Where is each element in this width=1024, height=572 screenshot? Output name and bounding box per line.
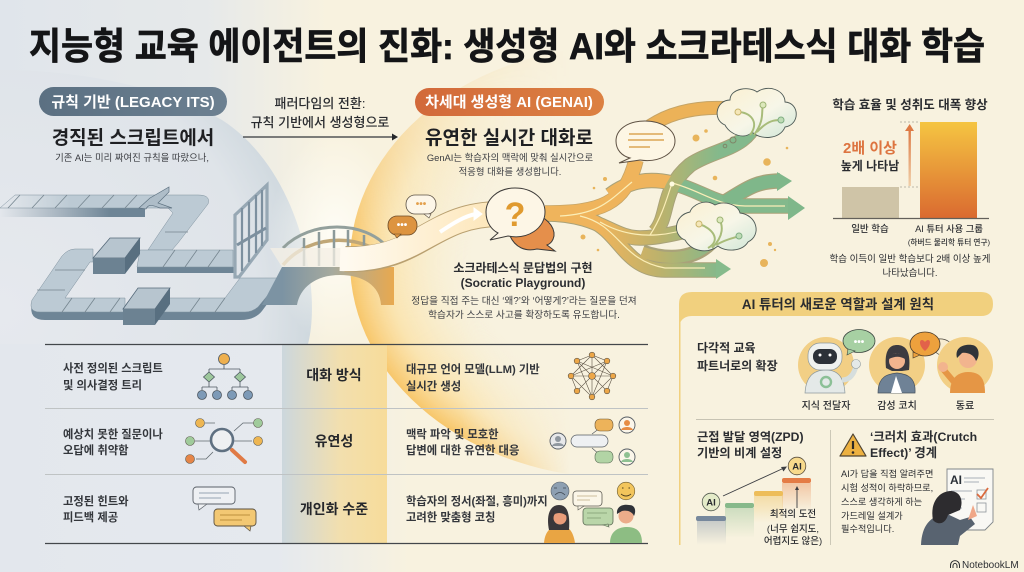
role labels: 감성 코치	[877, 399, 917, 412]
bar labels: AI 튜터 사용 그룹	[915, 224, 983, 234]
text block: Socratic playground: (Socratic Playground)	[461, 276, 585, 290]
label: optimal challenge	[764, 508, 822, 547]
row: flexibility: 맥락 파악 및 모호한	[406, 427, 499, 441]
role labels: 동료	[956, 400, 974, 412]
paradigm shift arrow: 패러다임의 전환:	[275, 96, 365, 111]
row: conversation mode	[63, 361, 540, 393]
table: legacy vs GenAI comparison	[45, 344, 648, 544]
text: multi-faceted partner: 다각적 교육	[697, 340, 756, 355]
row: flexibility: 오답에 취약함	[63, 443, 129, 457]
bubble: green	[583, 508, 613, 527]
row: conversation mode: 대규모 언어 모델(LLM) 기반	[406, 362, 540, 376]
row: conversation mode: 사전 정의된 스크립트	[63, 361, 163, 375]
panel header	[679, 292, 993, 545]
chart: learning gain bars	[830, 97, 991, 279]
text: crutch description	[841, 468, 933, 534]
row: personalization: 피드백 제공	[63, 510, 118, 524]
text: multi-faceted partner	[697, 340, 778, 373]
text: crutch description: 스스로 생각하게 하는	[841, 496, 922, 507]
text: ZPD scaffold: 근접 발달 영역(ZPD)	[697, 430, 804, 444]
branches	[545, 108, 805, 279]
face: frustrated	[551, 482, 569, 500]
pill: legacy label: 규칙 기반 (LEGACY ITS)	[51, 94, 215, 111]
row: conversation mode: 실시간 생성	[406, 380, 461, 393]
bar labels: 일반 학습	[851, 223, 889, 235]
heading: crutch effect: Effect)’ 경계	[870, 446, 937, 460]
text: GenAI description: 적응형 대화를 생성합니다.	[459, 166, 561, 177]
panel: generative AI heading	[415, 88, 604, 177]
bar: AI tutor group	[920, 122, 977, 218]
chart caption: 나타났습니다.	[882, 268, 938, 279]
diagram: scaffold steps	[696, 457, 822, 547]
block: lower track block	[123, 288, 170, 325]
block: upper track block	[93, 238, 140, 274]
text block: Socratic playground: 정답을 직접 주는 대신 ‘왜?’와 ‘어떻게?’라는 질문을 던져	[411, 294, 637, 307]
marker: AI start: AI	[706, 498, 716, 508]
cloud: lower idea	[676, 202, 756, 251]
paradigm shift arrow	[243, 96, 398, 140]
bubble: question mark: ?	[505, 196, 525, 234]
icon: neural network	[568, 352, 616, 400]
decorative dots	[580, 129, 788, 267]
text: GenAI description	[427, 152, 594, 177]
text: crutch description: 필수적입니다.	[841, 523, 894, 534]
title: 지능형 교육 에이전트의 진화: 생성형 AI와 소크라테스식 대화 학습	[29, 26, 985, 67]
callout: more than twice	[841, 140, 899, 173]
pill: GenAI label: 차세대 생성형 AI (GENAI)	[425, 94, 593, 111]
row: personalization: 개인화 수준	[300, 501, 368, 517]
logo: NotebookLM: NotebookLM	[962, 560, 1019, 571]
callout: more than twice: 2배 이상	[843, 140, 897, 157]
label: optimal challenge: (너무 쉽지도,	[767, 524, 819, 535]
row: conversation mode: 및 의사결정 트리	[63, 378, 142, 392]
row: personalization: 학습자의 정서(좌절, 흥미)까지	[406, 494, 548, 508]
role: knowledge transmitter robot	[798, 330, 875, 393]
paradigm shift arrow: 규칙 기반에서 생성형으로	[251, 115, 389, 130]
role labels	[802, 399, 974, 412]
icon: warning	[840, 434, 866, 456]
bar labels: (하버드 물리학 튜터 연구)	[908, 237, 991, 247]
avatar: learner	[550, 433, 566, 449]
heading: crutch effect	[870, 429, 977, 460]
person: woman	[544, 505, 575, 543]
row: flexibility: 예상치 못한 질문이나	[63, 427, 163, 441]
center column band	[282, 345, 387, 543]
row: personalization: 고정된 힌트와	[63, 494, 129, 508]
avatar: green	[619, 449, 635, 465]
chart title: 학습 효율 및 성취도 대폭 향상	[832, 97, 988, 112]
text: ZPD scaffold: 기반의 비계 설정	[697, 445, 782, 460]
text: crutch description: 가드레일 설계가	[841, 510, 903, 521]
row: flexibility: 유연성	[315, 433, 353, 449]
bridge	[262, 227, 394, 305]
bar: general learning	[842, 187, 899, 218]
marker: AI goal: AI	[792, 462, 802, 472]
cloud: upper idea	[717, 88, 796, 148]
label: optimal challenge: 최적의 도전	[770, 508, 816, 520]
heading: rigid scripts: 경직된 스크립트에서	[52, 127, 214, 149]
icon: fixed chat bubbles	[193, 487, 256, 531]
text: legacy description: 기존 AI는 미리 짜여진 규칙을 따랐으나,	[55, 152, 209, 163]
bar labels	[851, 223, 991, 247]
text: multi-faceted partner: 파트너로의 확장	[697, 358, 778, 373]
illustration: student checking document	[921, 469, 993, 545]
text block: Socratic playground: 소크라테스식 문답법의 구현	[453, 260, 593, 275]
outlines	[545, 108, 790, 270]
avatar: orange	[619, 417, 635, 433]
bubbles: heart	[910, 332, 953, 361]
arrow: doubled gain	[905, 124, 914, 186]
illustration: emotional coaching	[544, 482, 642, 543]
ribbon to question bubble	[340, 208, 500, 259]
row: conversation mode: 대화 방식	[306, 367, 362, 383]
callout: more than twice: 높게 나타남	[841, 159, 899, 173]
row: personalization: 고려한 맞춤형 코칭	[406, 510, 495, 524]
chart caption	[830, 254, 990, 279]
role labels: 지식 전달자	[802, 399, 850, 412]
bubble: robot chat: •••	[854, 337, 865, 348]
illustration: branching dialogue flow	[340, 88, 805, 279]
text: GenAI description: GenAI는 학습자의 맥락에 맞춰 실시간으로	[427, 152, 594, 163]
bubbles: small dots chat: •••	[416, 199, 427, 210]
row: flexibility	[63, 427, 519, 457]
role: peer	[937, 337, 993, 393]
pill: legacy label	[39, 87, 227, 116]
icon: magnifier with nodes	[186, 418, 262, 464]
bubbles: small dots chat: •••	[397, 220, 408, 231]
ramp	[139, 187, 172, 209]
label: optimal challenge: 어렵지도 않은)	[764, 535, 822, 547]
text block: Socratic playground	[411, 260, 637, 321]
pill: GenAI label	[415, 88, 604, 116]
illustration: rigid script track	[0, 185, 394, 325]
page background	[0, 0, 562, 572]
heading: flexible real-time dialogue: 유연한 실시간 대화로	[425, 127, 593, 149]
text: crutch description: 시험 성적이 하락하므로,	[841, 482, 933, 493]
panel: AI tutor roles and design principles	[679, 292, 994, 547]
text: crutch description: AI가 답을 직접 알려주면	[841, 468, 933, 479]
bubbles: small dots chat	[388, 195, 436, 238]
track surfaces	[0, 195, 282, 312]
bubble: text lines	[616, 121, 675, 163]
heading: crutch effect: ‘크러치 효과(Crutch	[870, 429, 977, 444]
chart caption: 학습 이득이 일반 학습보다 2배 이상 높게	[830, 254, 990, 265]
track sides	[0, 208, 282, 320]
role: emotional coach	[869, 332, 953, 393]
bubble: question mark	[486, 188, 555, 251]
gate	[235, 185, 267, 277]
face: smiling	[617, 482, 635, 500]
illustration: student checking document: AI	[950, 473, 962, 487]
panel header: AI 튜터의 새로운 역할과 설계 원칙	[742, 297, 934, 312]
icon: decision tree	[198, 354, 252, 400]
row: flexibility: 답변에 대한 유연한 대응	[406, 443, 519, 457]
text block: Socratic playground: 학습자가 스스로 사고를 확장하도록 유도합니다.	[428, 308, 620, 321]
text: ZPD scaffold	[697, 430, 804, 460]
row: personalization	[63, 494, 548, 524]
panel: legacy rule-based heading	[39, 87, 227, 163]
icon: contextual dialogue	[550, 417, 635, 465]
bubble: neutral	[573, 491, 602, 510]
person: man	[610, 505, 642, 543]
